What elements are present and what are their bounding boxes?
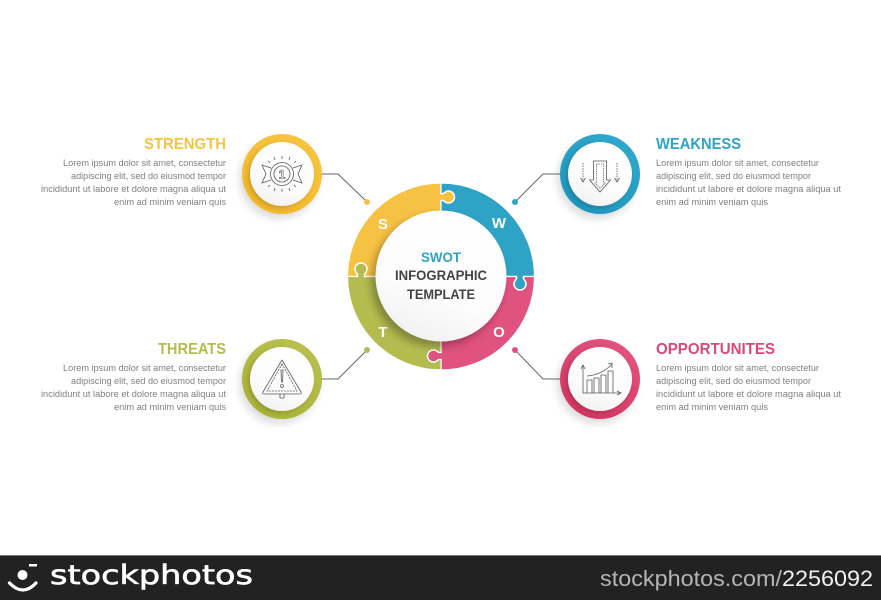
segment: opportunities bbox=[441, 276, 534, 370]
center title: TEMPLATE: TEMPLATE bbox=[407, 287, 475, 302]
puzzle knob: pink bbox=[428, 350, 442, 362]
body: strength: incididunt ut labore et dolore magna aliqua ut bbox=[41, 184, 227, 194]
footer image id: stockphotos.com/ 2256092 bbox=[600, 566, 873, 591]
center circle bbox=[371, 210, 506, 347]
body: strength: Lorem ipsum dolor sit amet, consectetur bbox=[63, 158, 226, 168]
segment: strength bbox=[348, 183, 441, 276]
heading: strength: STRENGTH bbox=[144, 136, 226, 153]
body: weakness: enim ad minim veniam quis bbox=[656, 197, 769, 207]
heading: weakness: WEAKNESS bbox=[656, 136, 741, 153]
body: threats: incididunt ut labore et dolore magna aliqua ut bbox=[41, 389, 227, 399]
body: opportunities: enim ad minim veniam quis bbox=[656, 402, 769, 412]
badge: opportunities bbox=[557, 339, 640, 424]
body: strength: adipiscing elit, sed do eiusmod tempor bbox=[71, 171, 226, 181]
ring letter O: O bbox=[493, 324, 505, 341]
body: weakness bbox=[656, 158, 842, 207]
icon: warning sign bbox=[263, 360, 301, 398]
center puzzle ring bbox=[348, 183, 534, 370]
badge: strength bbox=[239, 134, 322, 219]
heading: opportunities: OPPORTUNITES bbox=[656, 341, 775, 358]
puzzle knob: blue bbox=[514, 275, 526, 290]
puzzle knob: green bbox=[355, 263, 367, 278]
ring letter W: W bbox=[492, 215, 507, 232]
ring letter T: T bbox=[378, 324, 388, 341]
heading: threats: THREATS bbox=[158, 341, 226, 358]
center title: INFOGRAPHIC: INFOGRAPHIC bbox=[395, 268, 487, 283]
badge: threats bbox=[239, 339, 322, 424]
body: opportunities bbox=[656, 363, 842, 412]
connector: threats bbox=[322, 347, 370, 379]
segment: threats bbox=[348, 276, 441, 370]
body: weakness: Lorem ipsum dolor sit amet, consectetur bbox=[656, 158, 819, 168]
connector: strength bbox=[322, 174, 370, 205]
text block: strength bbox=[41, 136, 227, 207]
icon: medal: 1 bbox=[279, 168, 286, 182]
text block: opportunities bbox=[656, 341, 842, 412]
connector: weakness bbox=[512, 174, 560, 205]
ring letter S: S bbox=[378, 216, 388, 233]
body: weakness: incididunt ut labore et dolore magna aliqua ut bbox=[656, 184, 842, 194]
center title: SWOT: SWOT bbox=[421, 250, 462, 265]
body: threats bbox=[41, 363, 227, 412]
body: threats: adipiscing elit, sed do eiusmod tempor bbox=[71, 376, 226, 386]
text block: weakness bbox=[656, 136, 842, 207]
text block: threats bbox=[41, 341, 227, 412]
body: opportunities: adipiscing elit, sed do eiusmod tempor bbox=[656, 376, 811, 386]
body: strength: enim ad minim veniam quis bbox=[114, 197, 227, 207]
footer logo wordmark: stockphotos bbox=[50, 560, 253, 591]
puzzle knob: yellow bbox=[440, 191, 454, 203]
footer banner bbox=[0, 555, 881, 600]
body: opportunities: incididunt ut labore et dolore magna aliqua ut bbox=[656, 389, 842, 399]
segment: weakness bbox=[441, 183, 534, 276]
body: threats: Lorem ipsum dolor sit amet, consectetur bbox=[63, 363, 226, 373]
icon: down arrows bbox=[580, 161, 620, 192]
body: strength bbox=[41, 158, 227, 207]
footer logo icon bbox=[10, 564, 37, 590]
icon: growth chart bbox=[581, 363, 621, 395]
connector: opportunities bbox=[512, 347, 560, 379]
badge: weakness bbox=[557, 134, 640, 219]
body: opportunities: Lorem ipsum dolor sit amet, consectetur bbox=[656, 363, 819, 373]
body: weakness: adipiscing elit, sed do eiusmod tempor bbox=[656, 171, 811, 181]
body: threats: enim ad minim veniam quis bbox=[114, 402, 227, 412]
